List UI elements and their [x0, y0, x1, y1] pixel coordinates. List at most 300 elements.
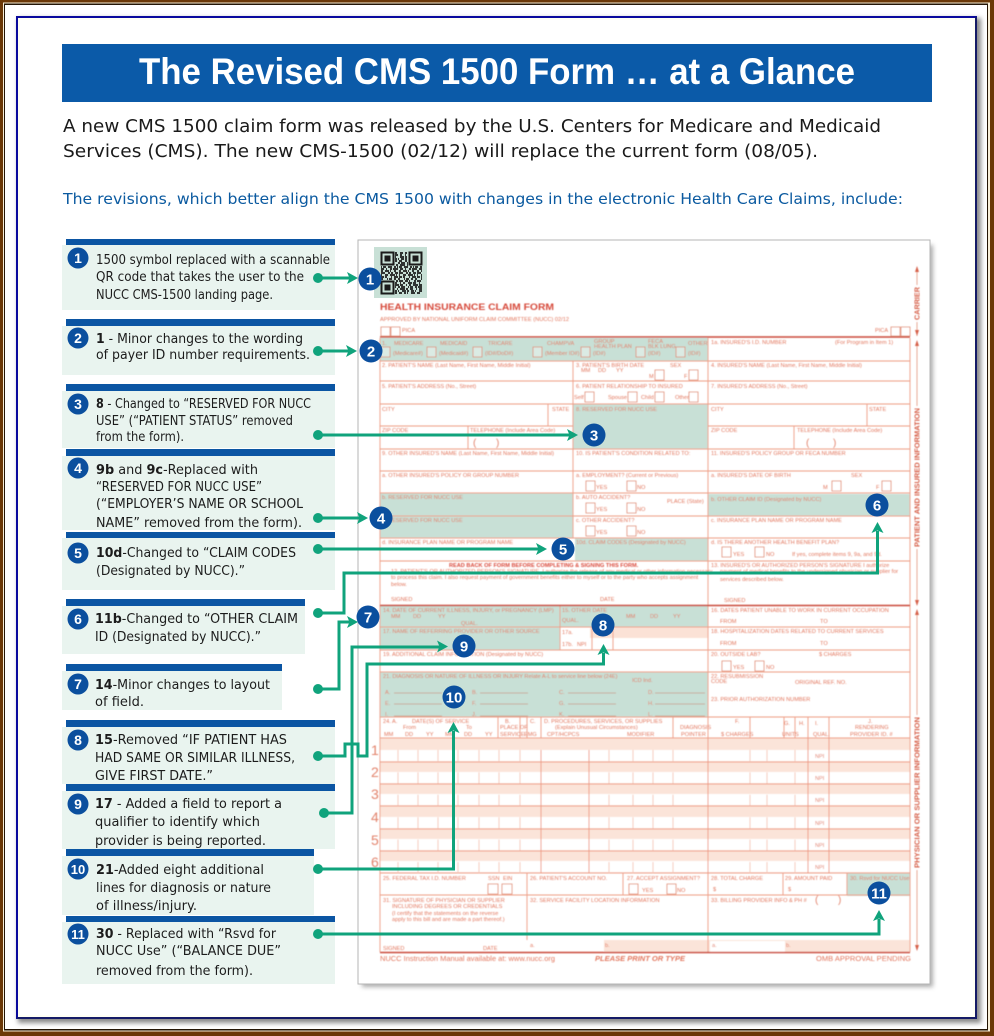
form labels: SEX: [670, 363, 681, 369]
form labels: DIAGNOSIS: [680, 725, 711, 731]
form labels: b. OTHER CLAIM ID (Designated by NUCC): [711, 497, 821, 503]
form labels: a.: [530, 943, 535, 949]
form labels: 29. AMOUNT PAID: [785, 876, 832, 882]
form labels: c. RESERVED FOR NUCC USE: [382, 518, 463, 524]
form labels: NPI: [815, 754, 825, 760]
badge: form marker 4: [370, 506, 392, 530]
panel: change 2: [62, 319, 335, 375]
form labels: F: [876, 485, 880, 491]
panel: change 9: provider is being reported.: [95, 833, 266, 849]
form labels: 16. DATES PATIENT UNABLE TO WORK IN CURRENT OCCUPATION: [711, 608, 889, 614]
form labels: d. IS THERE ANOTHER HEALTH BENEFIT PLAN?: [711, 540, 839, 546]
form labels: 4. INSURED'S NAME (Last Name, First Name, Middle Initial): [711, 363, 862, 369]
form labels: ): [496, 438, 499, 449]
form labels: MM: [445, 732, 455, 738]
form labels: [380, 317, 911, 963]
panel: change 1: NUCC CMS-1500 landing page.: [96, 287, 273, 303]
form labels: NPI: [815, 821, 825, 827]
form labels: Child: [641, 395, 654, 401]
panel: change 10: [62, 849, 314, 915]
form labels: PICA: [875, 328, 888, 334]
form labels: 2. PATIENT'S NAME (Last Name, First Name, Middle Initial): [382, 363, 531, 369]
salmon rows: [380, 627, 910, 952]
form labels: Spouse: [608, 395, 627, 401]
form labels: NPI: [815, 798, 825, 804]
form labels: F.: [472, 701, 477, 707]
panel: change 8: HAD SAME OR SIMILAR ILLNESS,: [95, 750, 295, 766]
form labels: YES: [642, 888, 653, 894]
intro text: A new CMS 1500 claim form was released by the U.S. Centers for Medicare and Medicaid: [63, 117, 881, 137]
form labels: OTHER: [688, 341, 708, 347]
form labels: QUAL.: [461, 621, 478, 627]
form labels: OMB APPROVAL PENDING: [816, 954, 911, 963]
badge: form marker 9: [452, 634, 476, 658]
form labels: (: [815, 895, 819, 906]
form labels: YES: [596, 507, 607, 513]
form labels: 8. RESERVED FOR NUCC USE: [576, 407, 657, 413]
service line numbers: 1: [371, 742, 379, 758]
panel: change 3: from the form).: [96, 429, 184, 445]
panel: change 10: 10: [71, 862, 85, 877]
badge: form marker 5: [552, 538, 574, 560]
panel: change 1: QR code that takes the user to the: [96, 269, 304, 285]
form labels: NPI: [815, 843, 825, 849]
form labels: NPI: [815, 865, 825, 871]
form labels: b.: [605, 943, 610, 949]
form labels: FROM: [720, 641, 737, 647]
panel: change 4: [62, 449, 335, 531]
form labels: a.: [712, 943, 717, 949]
form labels: MODIFIER: [627, 732, 654, 738]
arrow: change 11: [313, 910, 885, 939]
form labels: MM: [384, 732, 394, 738]
form labels: E.: [385, 701, 391, 707]
panel: change 10: of illness/injury.: [96, 898, 197, 914]
form labels: H.: [799, 721, 805, 727]
panel: change 4: 4: [74, 460, 82, 476]
form labels: (Medicaid#): [439, 351, 468, 357]
arrow: change 2: [313, 345, 357, 357]
form labels: 7. INSURED'S ADDRESS (No., Street): [711, 384, 808, 390]
form labels: (ID#): [688, 351, 701, 357]
badge: form marker 11: 11: [871, 886, 887, 902]
form labels: to process this claim. I also request payment of government benefits either to myself or to the party who accepts assignment: [391, 575, 699, 581]
side labels: CARRIER: [914, 287, 922, 320]
subheading: The revisions, which better align the CMS 1500 with changes in the electronic Health Care Claims, include:: [62, 190, 903, 208]
form labels: 30. Rsvd for NUCC Use: [850, 876, 909, 882]
form labels: TRICARE: [488, 341, 513, 347]
panel: change 6: [62, 599, 305, 654]
service line numbers: 6: [371, 854, 379, 870]
form labels: CHAMPVA: [547, 341, 575, 347]
form labels: (I certify that the statements on the reverse: [392, 911, 498, 917]
arrow: change 5: [313, 543, 547, 555]
form labels: 10d. CLAIM CODES (Designated by NUCC): [576, 540, 686, 546]
form labels: PLACE OF: [500, 725, 528, 731]
panel: change 4: NAME” removed from the form).: [96, 515, 302, 531]
form labels: DD: [464, 732, 472, 738]
form labels: STATE: [552, 407, 569, 413]
form labels: QUAL.: [813, 732, 830, 738]
badge: form marker 1: [358, 268, 382, 290]
icon: QR code: [374, 247, 427, 298]
form labels: 9. OTHER INSURED'S NAME (Last Name, First Name, Middle Initial): [382, 451, 554, 457]
heavy rules: [380, 337, 910, 952]
form labels: 13. INSURED'S OR AUTHORIZED PERSON'S SIGNATURE I authorize: [711, 563, 889, 569]
service line numbers: 4: [371, 809, 379, 825]
form labels: DD: [598, 368, 606, 374]
form labels: G.: [559, 701, 565, 707]
panel: change 6: 6: [74, 611, 82, 627]
arrow: change 3: [313, 429, 578, 441]
form labels: 1a. INSURED'S I.D. NUMBER: [711, 340, 786, 346]
form labels: (Member ID#): [545, 351, 580, 357]
form labels: d. INSURANCE PLAN NAME OR PROGRAM NAME: [382, 540, 513, 546]
form labels: 17a.: [562, 630, 573, 636]
badge: form marker 9: 9: [460, 638, 468, 656]
form labels: YES: [596, 485, 607, 491]
form labels: 23. PRIOR AUTHORIZATION NUMBER: [711, 697, 810, 703]
form labels: 3. PATIENT'S BIRTH DATE: [576, 363, 644, 369]
form labels: CITY: [711, 407, 724, 413]
form labels: c. INSURANCE PLAN NAME OR PROGRAM NAME: [711, 518, 842, 524]
form labels: 17. NAME OF REFERRING PROVIDER OR OTHER SOURCE: [383, 629, 540, 635]
form labels: 19. ADDITIONAL CLAIM INFORMATION (Designated by NUCC): [383, 652, 543, 658]
form labels: Other: [675, 395, 689, 401]
form labels: ): [838, 895, 841, 906]
badge: form marker 10: 10: [446, 690, 462, 706]
form labels: If yes, complete items 9, 9a, and 9d.: [792, 552, 882, 558]
form labels: TO: [820, 619, 828, 625]
form labels: NO: [677, 888, 686, 894]
form labels: DATE: [600, 597, 615, 603]
form labels: MM: [626, 614, 636, 620]
intro text: [63, 117, 881, 162]
form labels: DATE: [483, 946, 498, 952]
side labels: [914, 266, 922, 951]
form labels: D.: [648, 690, 654, 696]
panel: change 7: 7: [74, 676, 82, 692]
panel: change 11: [62, 916, 335, 984]
form labels: 1.: [382, 341, 387, 347]
form labels: C.: [559, 690, 565, 696]
arrow: change 1: [313, 272, 358, 284]
title banner: [62, 44, 932, 102]
arrow: change 4: [313, 512, 368, 524]
form labels: 10. IS PATIENT'S CONDITION RELATED TO:: [576, 451, 691, 457]
badge: form marker 8: [592, 614, 614, 636]
form labels: I.: [385, 712, 389, 718]
form labels: 18. HOSPITALIZATION DATES RELATED TO CURRENT SERVICES: [711, 629, 884, 635]
form labels: NPI: [577, 642, 587, 648]
panel: change 5: 10d-Changed to “CLAIM CODES: [96, 545, 296, 561]
panel: change 9: 17 - Added a field to report a: [95, 796, 282, 812]
form labels: YY: [616, 368, 624, 374]
arrow: change 7: [313, 616, 358, 694]
form labels: K.: [559, 712, 565, 718]
form labels: DD: [650, 614, 658, 620]
badge: form marker 3: [582, 424, 606, 446]
service table columns: [398, 750, 795, 873]
panel: change 7: 14-Minor changes to layout: [95, 677, 270, 693]
form labels: (ID#): [593, 351, 606, 357]
panel: change 9: 9: [74, 796, 82, 812]
form labels: ZIP CODE: [711, 428, 738, 434]
form labels: RENDERING: [855, 725, 889, 731]
form labels: C.: [530, 719, 536, 725]
form labels: NUCC Instruction Manual available at: www.nucc.org: [380, 954, 555, 963]
form labels: MEDICARE: [394, 341, 424, 347]
form labels: CITY: [382, 407, 395, 413]
form labels: B.: [505, 719, 511, 725]
panel: change 1: 1: [74, 250, 82, 266]
form labels: YY: [673, 614, 681, 620]
form labels: 28. TOTAL CHARGE: [711, 876, 763, 882]
form labels: F: [684, 374, 688, 380]
form labels: MM: [581, 368, 591, 374]
panel: change 2: 2: [74, 330, 82, 346]
form labels: YY: [438, 614, 446, 620]
panel: change 7: of field.: [95, 694, 144, 710]
form labels: (ID#): [648, 351, 661, 357]
form labels: G.: [784, 721, 790, 727]
form labels: 22. RESUBMISSION: [711, 674, 763, 680]
arrow: change 10: [313, 722, 460, 874]
form labels: NO: [766, 552, 775, 558]
service line numbers: 5: [371, 832, 379, 848]
form labels: PROVIDER ID. #: [850, 732, 893, 738]
form labels: NO: [637, 485, 646, 491]
panel: change 2: 1 - Minor changes to the wording: [96, 331, 303, 347]
form labels: a. EMPLOYMENT? (Current or Previous): [576, 473, 678, 479]
form labels: D. PROCEDURES, SERVICES, OR SUPPLIES: [544, 719, 663, 725]
form labels: 31. SIGNATURE OF PHYSICIAN OR SUPPLIER: [383, 898, 505, 904]
form labels: MEDICAID: [440, 341, 467, 347]
form labels: 17b.: [562, 642, 573, 648]
panel: change 9: [62, 784, 335, 849]
panel: change 5: (Designated by NUCC).”: [96, 563, 245, 579]
form labels: (Medicare#): [393, 351, 423, 357]
panel: change 10: 21-Added eight additional: [96, 862, 264, 878]
form labels: SEX: [851, 473, 862, 479]
form labels: 32. SERVICE FACILITY LOCATION INFORMATION: [530, 898, 660, 904]
form labels: DATE(S) OF SERVICE: [412, 719, 470, 725]
badge: form marker 4: 4: [377, 510, 386, 528]
form labels: INCLUDING DEGREES OR CREDENTIALS: [392, 904, 503, 910]
form labels: MM: [391, 614, 401, 620]
form labels: I.: [815, 721, 819, 727]
form labels: EMG: [524, 732, 537, 738]
panel: change 1: 1500 symbol replaced with a scannable: [96, 252, 330, 268]
panel: change 11: removed from the form).: [96, 963, 253, 979]
form labels: HEALTH PLAN: [594, 344, 632, 350]
form labels: SERVICE: [500, 732, 525, 738]
panel: change 3: USE” (“PATIENT STATUS” removed: [96, 413, 293, 429]
badge: form marker 7: 7: [364, 610, 372, 626]
form labels: 27. ACCEPT ASSIGNMENT?: [627, 876, 700, 882]
panel: change 8: 15-Removed “IF PATIENT HAS: [95, 732, 287, 748]
form labels: J.: [472, 712, 477, 718]
form labels: b. RESERVED FOR NUCC USE: [382, 495, 463, 501]
service line numbers: [371, 742, 379, 870]
form labels: POINTER: [681, 732, 706, 738]
form labels: TELEPHONE (Include Area Code): [797, 428, 882, 434]
panel: change 7: [62, 664, 282, 710]
form labels: YES: [733, 552, 744, 558]
form labels: From: [403, 725, 416, 731]
form labels: NO: [637, 530, 646, 536]
badge: form marker 1: 1: [366, 272, 374, 288]
form labels: NPI: [815, 776, 825, 782]
form labels: a. INSURED'S DATE OF BIRTH: [711, 473, 791, 479]
form labels: DD: [413, 614, 421, 620]
form labels: M: [649, 374, 654, 380]
panel: change 4: (“EMPLOYER’S NAME OR SCHOOL: [96, 496, 303, 512]
form labels: YY: [485, 732, 493, 738]
form labels: 5. PATIENT'S ADDRESS (No., Street): [382, 384, 476, 390]
panel: change 4: “RESERVED FOR NUCC USE”: [96, 479, 262, 495]
form labels: FROM: [720, 619, 737, 625]
form labels: To: [466, 725, 472, 731]
badge: form marker 2: 2: [367, 344, 375, 360]
form labels: payment of medical benefits to the undersigned physician or supplier for: [720, 569, 898, 575]
form labels: (ID#/DoD#): [485, 351, 513, 357]
form labels: 33. BILLING PROVIDER INFO & PH #: [711, 898, 808, 904]
diagnosis lines: [394, 693, 705, 716]
form labels: 6. PATIENT RELATIONSHIP TO INSURED: [576, 384, 683, 390]
form labels: YES: [733, 665, 744, 671]
arrow: change 6: [313, 522, 884, 618]
side labels: PHYSICIAN OR SUPPLIER INFORMATION: [914, 717, 922, 868]
form labels: 20. OUTSIDE LAB?: [711, 652, 760, 658]
form labels: SIGNED: [391, 597, 412, 603]
form labels: EIN: [503, 876, 512, 882]
badge: form marker 3: 3: [590, 428, 598, 444]
form labels: Self: [574, 395, 584, 401]
form grid lines: [380, 338, 910, 952]
badge: form marker 7: [356, 606, 380, 628]
form labels: YES: [596, 530, 607, 536]
badge: form marker 6: 6: [873, 498, 881, 514]
form labels: 14. DATE OF CURRENT ILLNESS, INJURY, or PREGNANCY (LMP): [383, 608, 554, 614]
form labels: UNITS: [782, 732, 799, 738]
form labels: ICD Ind.: [632, 678, 653, 684]
form labels: c. OTHER ACCIDENT?: [576, 518, 634, 524]
panel: change 8: 8: [74, 732, 82, 748]
form labels: M: [823, 485, 828, 491]
form labels: $ CHARGES: [721, 732, 754, 738]
badge: form marker 11: [868, 882, 890, 904]
form labels: GROUP: [594, 339, 615, 345]
form labels: B.: [472, 690, 478, 696]
title banner: The Revised CMS 1500 Form … at a Glance: [139, 51, 855, 92]
form labels: ORIGINAL REF. NO.: [795, 680, 847, 686]
badge: form marker 2: [360, 340, 382, 362]
form labels: (: [473, 438, 477, 449]
panel: change 8: [62, 720, 335, 784]
form labels: NO: [766, 665, 775, 671]
form labels: below.: [391, 582, 407, 588]
panel: change 2: of payer ID number requirements.: [96, 347, 310, 363]
form labels: (Explain Unusual Circumstances): [555, 725, 638, 731]
badge: form marker 10: [442, 686, 466, 708]
badge: form marker 5: 5: [559, 542, 567, 558]
form labels: PICA: [402, 328, 415, 334]
form labels: CPT/HCPCS: [547, 732, 580, 738]
badge: form marker 8: 8: [599, 618, 607, 634]
intro text: Services (CMS). The new CMS-1500 (02/12) will replace the current form (08/05).: [63, 142, 818, 162]
badge: form marker 6: [866, 494, 888, 516]
form labels: 12. PATIENT'S OR AUTHORIZED PERSON'S SIGNATURE. I authorize the release of any medical or other information necessary: [391, 569, 713, 575]
form labels: FECA: [648, 339, 663, 345]
panel: change 6: 11b-Changed to “OTHER CLAIM: [95, 611, 298, 627]
panel: change 1: [62, 239, 335, 310]
form labels: TELEPHONE (Include Area Code): [470, 428, 555, 434]
form labels: STATE: [869, 407, 886, 413]
form labels: 15. OTHER DATE: [562, 608, 607, 614]
form labels: services described below.: [720, 577, 784, 583]
form labels: $: [713, 887, 717, 893]
form labels: ): [833, 438, 836, 449]
form labels: NO: [637, 507, 646, 513]
form labels: SSN: [488, 876, 500, 882]
checkboxes: [381, 327, 910, 894]
form labels: b. AUTO ACCIDENT?: [576, 495, 630, 501]
panel: change 3: 3: [74, 396, 82, 412]
form labels: ZIP CODE: [382, 428, 409, 434]
form labels: QUAL.: [562, 618, 579, 624]
form labels: 11. INSURED'S POLICY GROUP OR FECA NUMBER: [711, 451, 846, 457]
form labels: 24. A.: [383, 719, 398, 725]
panel: change 3: [62, 384, 335, 448]
form labels: PLACE (State): [667, 499, 704, 505]
form labels: a. OTHER INSURED'S POLICY OR GROUP NUMBER: [382, 473, 519, 479]
form heading: HEALTH INSURANCE CLAIM FORM: [380, 302, 554, 313]
form labels: 21. DIAGNOSIS OR NATURE OF ILLNESS OR INJURY Relate A-L to service line below (24E): [383, 674, 618, 680]
form labels: $ CHARGES: [819, 652, 852, 658]
panel: change 4: 9b and 9c-Replaced with: [96, 462, 258, 478]
form labels: CODE: [711, 679, 727, 685]
form labels: 26. PATIENT'S ACCOUNT NO.: [530, 876, 608, 882]
form labels: apply to this bill and are made a part thereof.): [392, 917, 505, 923]
form labels: SIGNED: [724, 598, 745, 604]
form labels: BLK LUNG: [648, 344, 676, 350]
form labels: b.: [786, 943, 791, 949]
form labels: PLEASE PRINT OR TYPE: [595, 954, 686, 963]
form labels: YY: [426, 732, 434, 738]
panel: change 5: [62, 532, 335, 590]
panel: change 5: 5: [74, 545, 82, 561]
form labels: (: [806, 438, 810, 449]
panel: change 11: 11: [71, 927, 85, 942]
panel: change 3: 8 - Changed to “RESERVED FOR NUCC: [96, 396, 311, 412]
form labels: J.: [868, 719, 873, 725]
form labels: READ BACK OF FORM BEFORE COMPLETING & SIGNING THIS FORM.: [449, 563, 639, 569]
panel: change 10: lines for diagnosis or nature: [96, 880, 271, 896]
form labels: F.: [735, 719, 740, 725]
form labels: H.: [648, 701, 654, 707]
form labels: APPROVED BY NATIONAL UNIFORM CLAIM COMMITTEE (NUCC) 02/12: [380, 317, 569, 323]
form labels: 25. FEDERAL TAX I.D. NUMBER: [383, 876, 466, 882]
arrow: change 9: [319, 640, 448, 818]
panel: change 8: GIVE FIRST DATE.”: [95, 768, 213, 784]
green highlighted fields: [380, 338, 910, 896]
form labels: DD: [405, 732, 413, 738]
form labels: A.: [385, 690, 391, 696]
form labels: SIGNED: [383, 946, 404, 952]
form labels: (For Program in Item 1): [835, 340, 893, 346]
arrow: change 8: [313, 644, 610, 761]
